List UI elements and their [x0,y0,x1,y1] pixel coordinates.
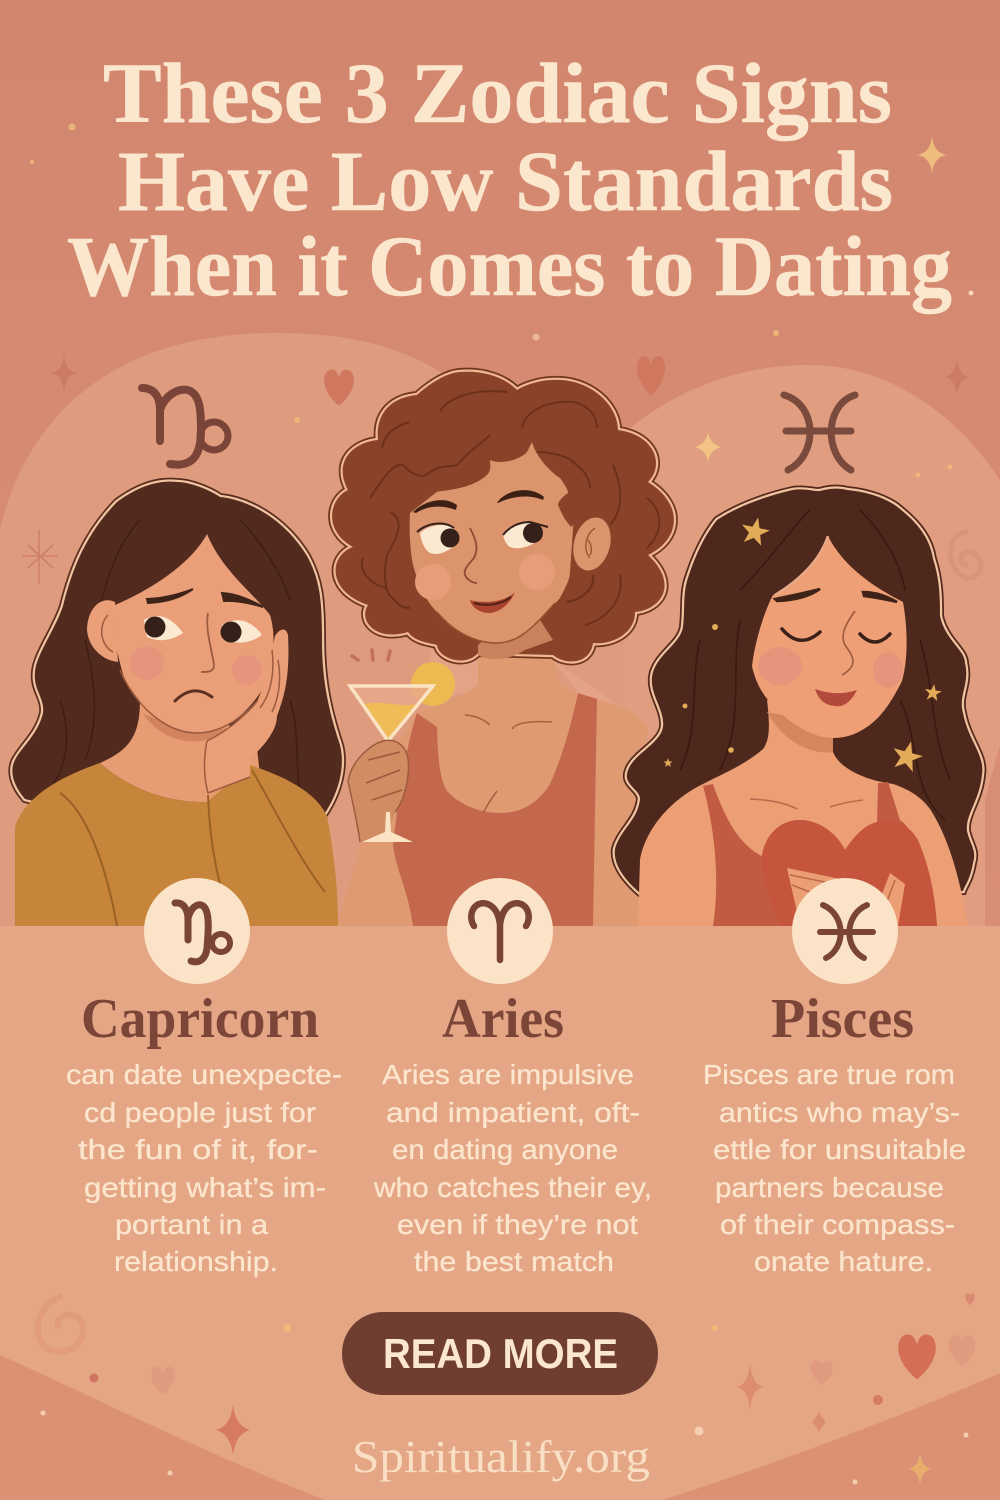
text: Capricorn description: getting what’s im- [84,1172,326,1203]
background sparkles and hearts [22,124,981,584]
neck: Capricorn [100,700,260,802]
text: Aries description: en dating anyone [392,1134,618,1165]
medallion: Capricorn [144,878,250,984]
footer: site name: Spiritualify.org [352,1431,650,1482]
face: Capricorn [114,534,274,733]
button: read more: READ MORE [383,1330,618,1377]
hair stars: Pisces [663,514,943,773]
ear: Capricorn [87,600,118,662]
text: Pisces description: Pisces are true rom [703,1059,955,1090]
text: Pisces description: antics who may’s- [719,1097,960,1128]
hand on cheek: Capricorn [204,629,288,793]
icon: large Capricorn symbol [142,388,228,465]
hands on heart: Pisces [787,868,905,926]
column: Capricorn [66,878,342,1277]
figure: Capricorn woman [12,482,342,926]
sweater: Capricorn [15,763,338,926]
text: Aries description: who catches their ey, [373,1172,652,1203]
title: When it Comes to Dating [67,218,952,314]
hand: Aries [348,740,408,842]
face: Pisces [752,536,907,738]
title: These 3 Zodiac Signs [103,45,892,141]
facial features: Pisces [750,589,903,809]
text: Pisces description: ettle for unsuitable [713,1134,966,1165]
medallion: Aries [447,878,553,984]
column: Aries [373,878,652,1277]
text: Capricorn description [66,1059,342,1277]
column: Pisces [703,878,966,1277]
text: Aries description: even if they’re not [397,1209,638,1240]
heading: Aries: Aries [442,988,564,1050]
fringe: Aries [400,400,590,527]
icon: large Pisces symbol [784,395,855,470]
figure: Aries woman with cocktail [332,372,674,926]
text: Capricorn description: the fun of it, for- [78,1134,318,1165]
hair: Capricorn [12,482,342,830]
text: Capricorn description: portant in a [115,1209,268,1240]
text: Pisces description [703,1059,966,1277]
text: Aries description: Aries are impulsive [382,1059,634,1090]
top with heart: Pisces [703,782,937,926]
panel: sign descriptions [0,878,1000,1500]
hair: Pisces [615,489,982,893]
heading: Pisces: Pisces [771,988,914,1050]
text: Pisces description: of their compass- [720,1209,955,1240]
text: Aries description [373,1059,652,1277]
body: Pisces [638,700,968,926]
text: Aries description: and impatient, oft- [386,1097,640,1128]
text: Pisces description: onate hature. [754,1246,933,1277]
neck shadow: Aries [478,620,553,659]
text: Aries description: the best match [414,1246,614,1277]
panel decorations [38,1293,975,1485]
text: Capricorn description: cd people just for [84,1097,316,1128]
button: read more [342,1312,658,1395]
tank top: Aries [393,693,597,926]
facial features: Capricorn [130,589,263,701]
text: Capricorn description: can date unexpecte- [66,1059,342,1090]
figure: Pisces woman [615,489,982,926]
facial features: Aries [413,490,555,613]
medallion: Pisces [792,878,898,984]
body: Aries [338,655,648,926]
heading: Capricorn: Capricorn [81,988,319,1050]
shoulder highlight: Aries [430,650,655,730]
cocktail glass [348,639,455,842]
curls: Aries [362,391,659,625]
text: Pisces description: partners because [715,1172,944,1203]
face: Aries [410,435,575,643]
text: Capricorn description: relationship. [114,1246,278,1277]
title: Have Low Standards [118,133,893,229]
hair back: Aries [332,372,674,661]
ear: Aries [568,513,616,575]
title [67,45,952,314]
